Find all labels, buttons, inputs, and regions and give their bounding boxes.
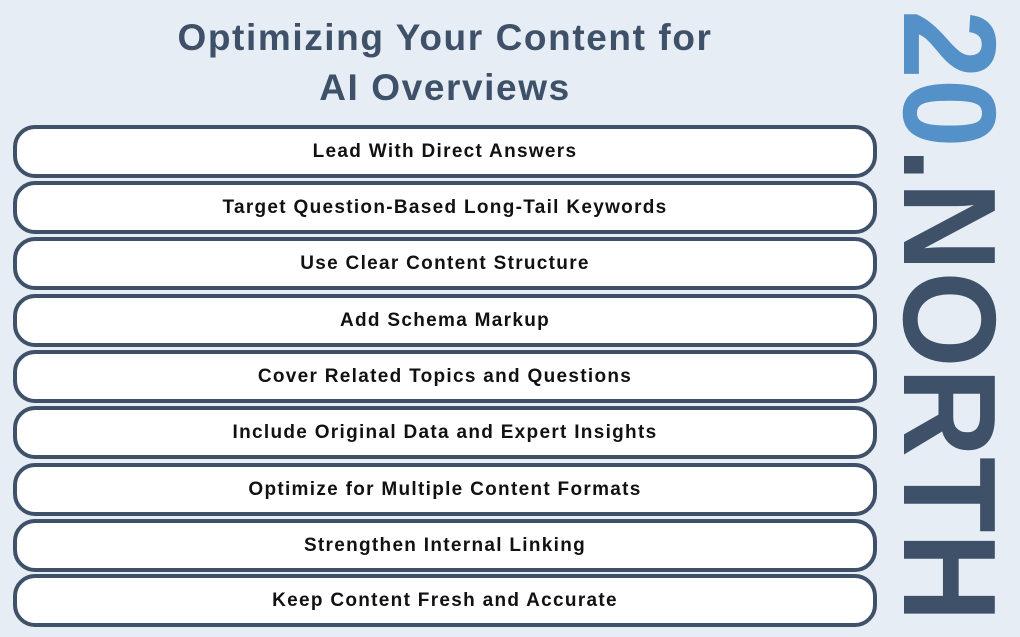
pill: related topics <box>13 350 877 403</box>
pill: schema <box>13 294 877 347</box>
pill: target keywords: Target Question-Based Long-Tail Keywords <box>222 197 668 218</box>
pill: fresh content <box>13 574 877 627</box>
pill: fresh content: Keep Content Fresh and Accurate <box>272 590 618 611</box>
pill: original data: Include Original Data and Expert Insights <box>233 422 657 443</box>
pill: internal linking <box>13 519 877 572</box>
title <box>177 17 713 108</box>
pill: lead with direct answers: Lead With Direct Answers <box>313 141 577 162</box>
pill: content structure: Use Clear Content Structure <box>300 253 590 274</box>
pill: internal linking: Strengthen Internal Linking <box>304 535 586 556</box>
pill: content structure <box>13 237 877 290</box>
title: Optimizing Your Content for <box>177 17 713 58</box>
pill: formats <box>13 463 877 516</box>
pill: formats: Optimize for Multiple Content Formats <box>248 479 642 500</box>
pill: schema: Add Schema Markup <box>340 310 550 331</box>
title: AI Overviews <box>319 67 571 108</box>
pill: lead with direct answers <box>13 125 877 178</box>
pill: related topics: Cover Related Topics and Questions <box>258 366 632 387</box>
pill: original data <box>13 406 877 459</box>
pill: target keywords <box>13 181 877 234</box>
